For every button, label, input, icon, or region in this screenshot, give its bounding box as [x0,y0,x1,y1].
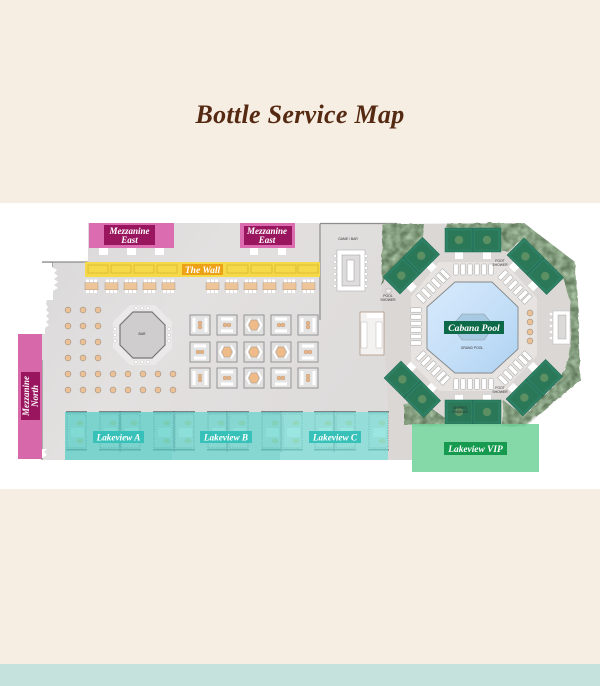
zone: Mezzanine East right: Mezzanine [246,226,287,236]
shower labels: SHOWER [492,263,508,267]
label: Lakeview C: Lakeview C [312,432,358,442]
zone: The Wall [85,262,320,277]
zone: Lakeview overlay A [65,412,172,460]
shower labels: POOL [383,294,393,298]
label: Cabana Pool: Cabana Pool [448,323,500,334]
bottom teal strip [0,664,600,686]
zone: Lakeview overlay C [280,412,388,460]
dining tables row [85,280,315,293]
zone: Mezzanine North: North [30,385,40,408]
label: Lakeview B: Lakeview B [203,432,248,442]
lower beige background band [0,489,600,664]
title: Bottle Service Map [194,100,405,129]
indoor bar octagon [113,305,172,365]
poolside table dots [527,310,533,344]
floor plan [18,223,580,472]
white cabana steps [406,252,538,401]
cabana: upper left [383,237,440,294]
floor: indoor wall outline [42,224,397,460]
round tables grid [65,307,176,393]
zone: Lakeview VIP [412,424,539,472]
deck: pool area floor [382,223,580,460]
floor: main indoor area [42,223,390,460]
zone: Lakeview tables [65,411,389,460]
cabana: top [445,228,501,252]
top beige background band [0,0,600,203]
zone: Mezzanine East right: East [258,235,276,245]
indoor bar octagon: BAR [139,332,146,336]
pool [427,282,518,373]
zone: Mezzanine North: Mezzanine [21,376,31,417]
left wall niches [41,263,58,458]
shower labels: CABANAS [452,410,469,414]
cabana: lower left [384,361,441,418]
zone: Mezzanine East right [240,223,295,248]
cabana: bottom [445,400,501,424]
shower labels [380,259,508,414]
cabana: upper right [507,238,564,295]
zone: Lakeview VIP: Lakeview VIP [447,445,503,455]
right deck bar [550,311,570,344]
zone: The Wall: The Wall [185,266,220,276]
shower labels: SHOWER [380,298,396,302]
pool chairs [410,264,532,390]
game bar island [334,237,368,291]
shower labels: SHOWER [492,390,508,394]
zone: Mezzanine North [18,334,42,459]
dj bar structure [360,312,384,355]
label: Lakeview A: Lakeview A [96,432,140,442]
small label: pool: GRAND POOL [461,346,483,350]
white mezzanine steps [99,247,286,255]
landscaping: planting beds [382,223,580,426]
cabana: lower right [506,359,563,416]
shower labels: FOOT [495,259,505,263]
lounge seating grid [190,315,318,388]
shower labels: FOOT [495,386,505,390]
game bar island: GAME / BAR [338,237,358,241]
zone: Mezzanine East left: Mezzanine [108,226,150,236]
zone: Lakeview overlay B [172,412,280,460]
zone: Mezzanine East left [89,223,174,248]
deck: pale pool surround [411,262,537,391]
zone: Mezzanine East left: East [120,235,138,245]
shower labels: SHARED [453,406,468,410]
pool centre feature [452,314,494,340]
